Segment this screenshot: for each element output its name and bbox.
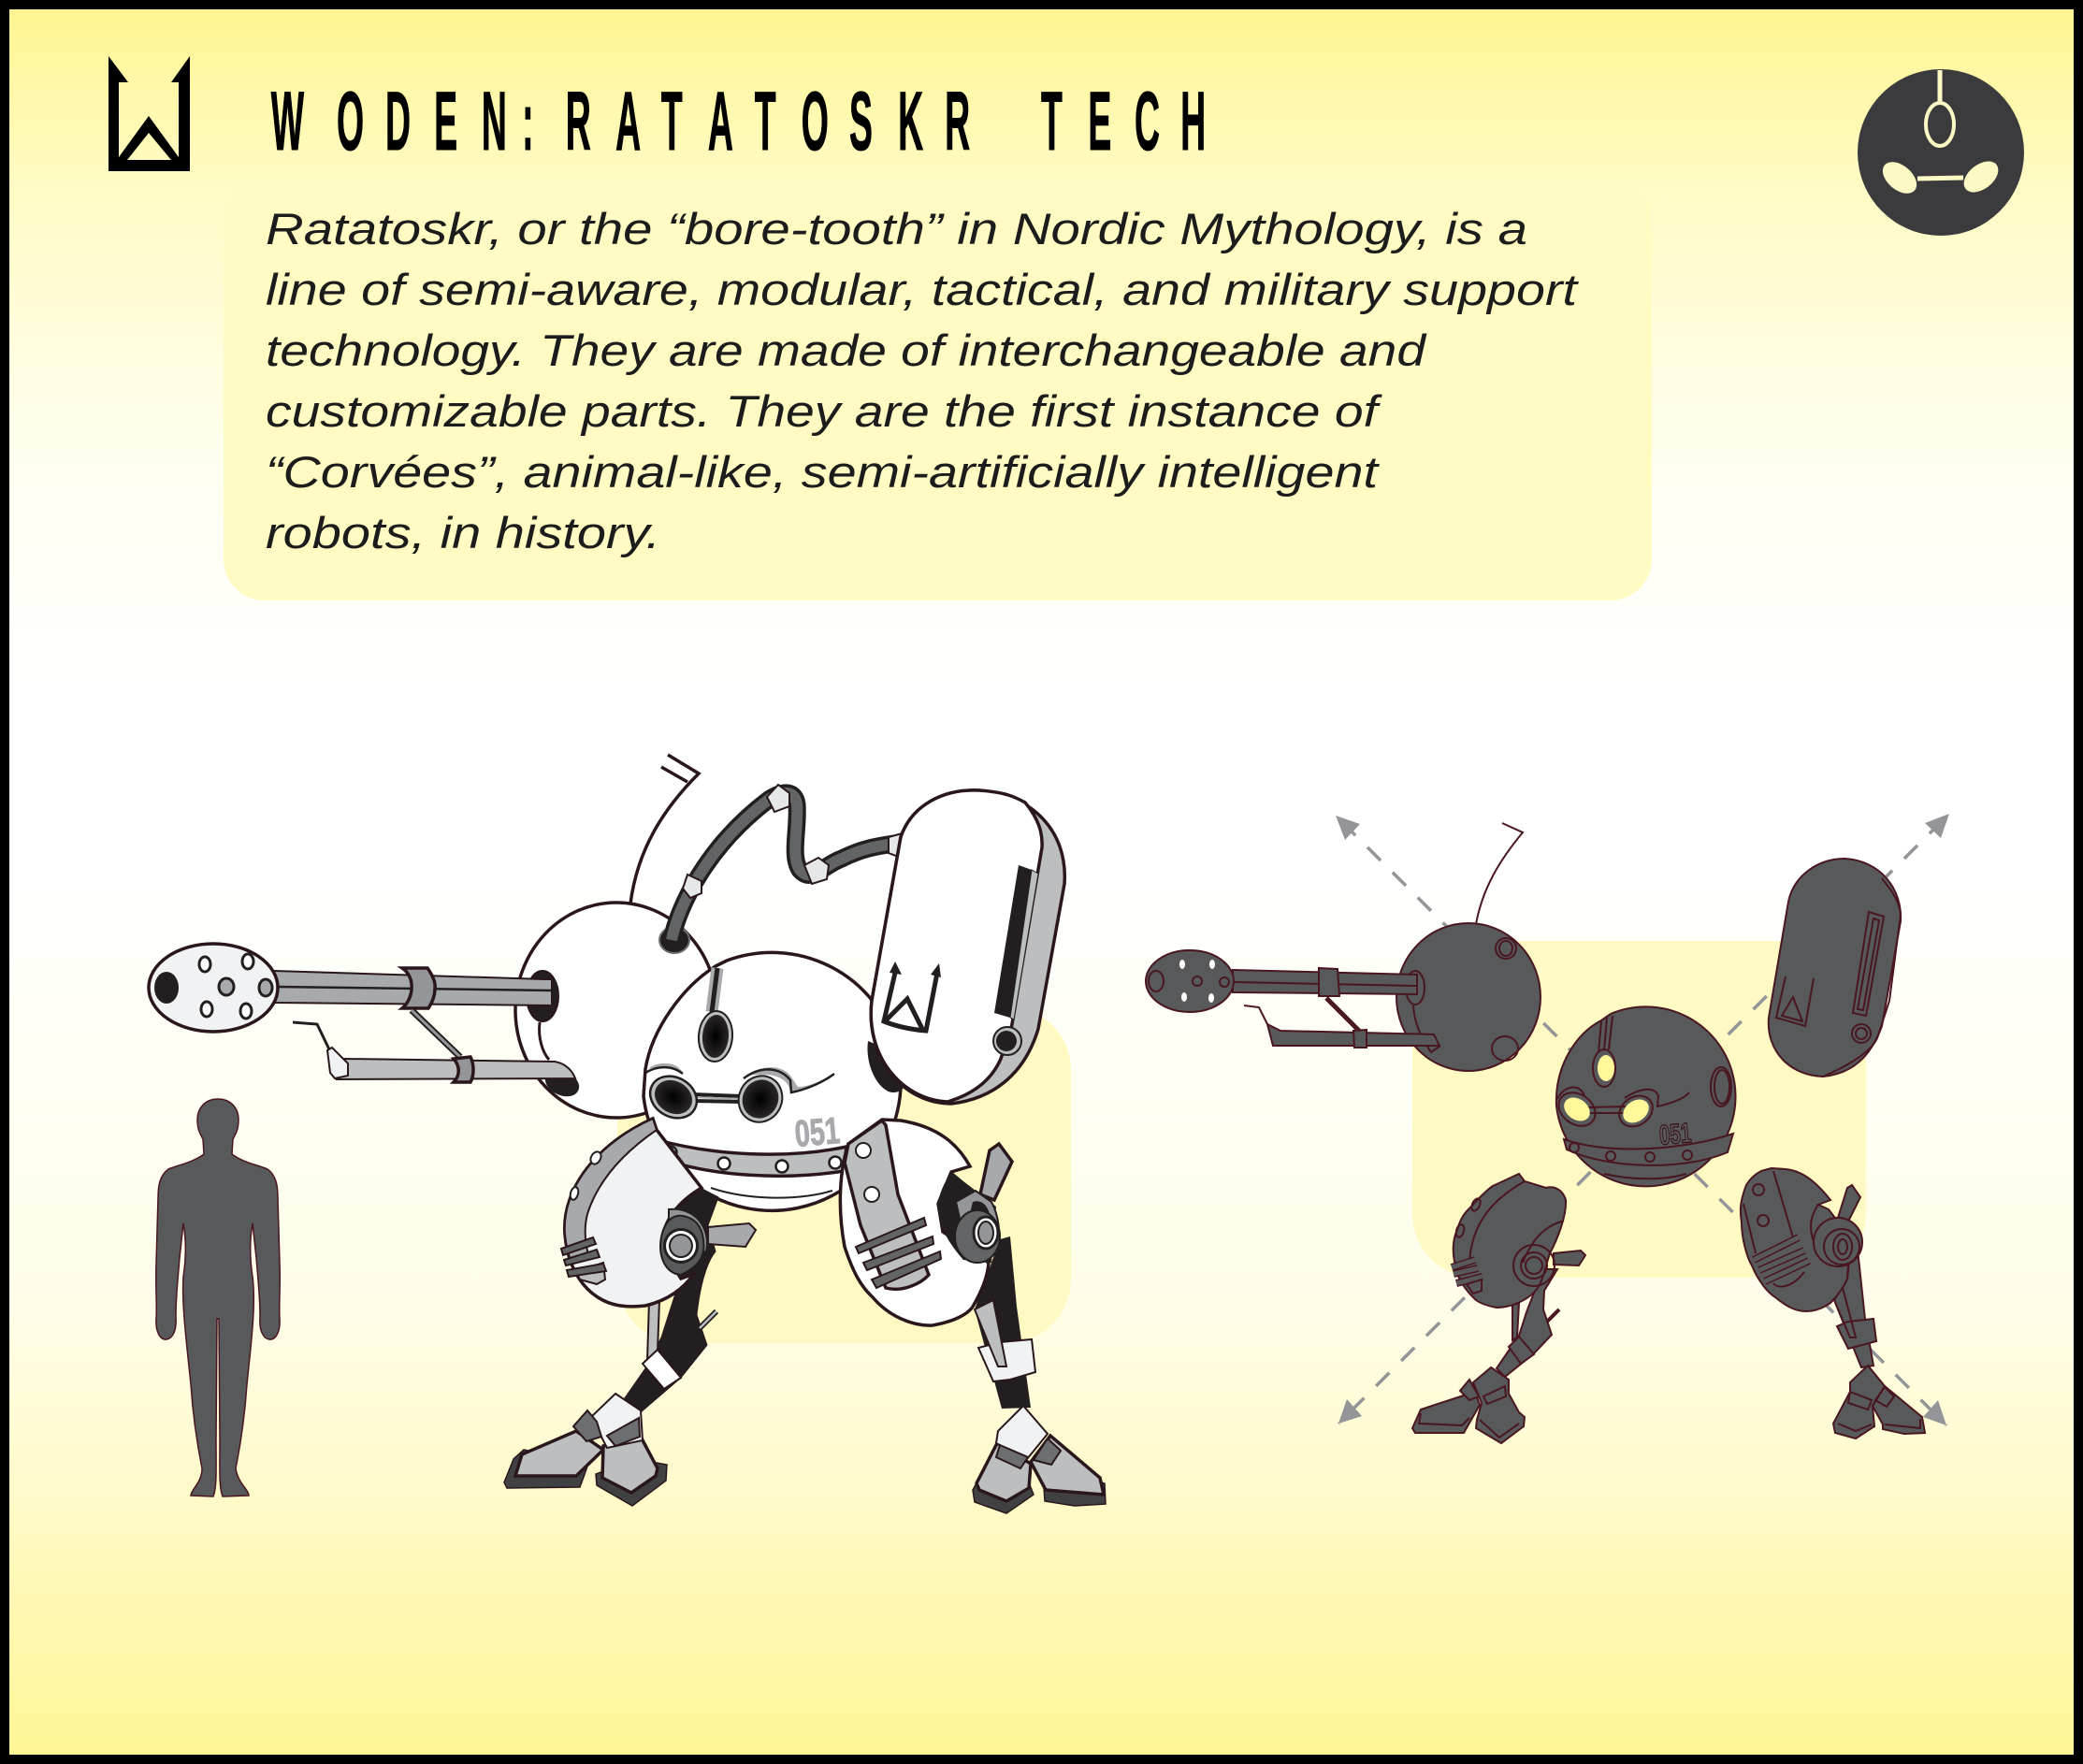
intro paragraph: customizable parts. They are the first instance of: [266, 386, 1383, 436]
brows: [645, 1063, 834, 1093]
dark collar belt: [1564, 1134, 1733, 1165]
intro text panel: [224, 178, 1652, 600]
logo: Woden crown W: [108, 56, 190, 171]
dark gun: [1146, 950, 1439, 1048]
shield slot: [994, 865, 1032, 1018]
shield capsule: [871, 790, 1064, 1104]
shield W logo: [884, 962, 941, 1031]
right shoulder strap: [845, 1121, 941, 1289]
collar belt: [655, 1139, 846, 1176]
left hip blade: [708, 1223, 756, 1247]
backdrop square: exploded robot: [1412, 941, 1866, 1278]
dark head: [1553, 1006, 1736, 1186]
right shoulder inner cavity: [938, 1172, 996, 1263]
left thigh and leg: [624, 1186, 756, 1412]
icon: robot face badge: [1858, 69, 2024, 236]
head: [643, 952, 901, 1210]
ear behind shield: [867, 1041, 907, 1092]
dark left shoulder: [1452, 1174, 1566, 1308]
dark shield: [1769, 859, 1901, 1077]
right hip blade: [980, 1144, 1012, 1200]
right hip gear: [955, 1191, 1000, 1263]
right foot: [973, 1406, 1106, 1513]
gun pod sphere: [515, 903, 717, 1118]
goggle eyes: [643, 1068, 789, 1129]
cable tube: [659, 785, 905, 953]
left hip gear: [660, 1209, 707, 1275]
left foot: [504, 1394, 667, 1506]
shield socket: [993, 1027, 1021, 1055]
serial number 051: 051: [793, 1109, 842, 1155]
right shoulder pad: [840, 1120, 1000, 1325]
dark left foot: [1412, 1367, 1525, 1443]
dark right shoulder: [1741, 1168, 1862, 1311]
intro paragraph: Ratatoskr, or the “bore-tooth” in Nordic Mythology, is a: [266, 204, 1527, 253]
intro paragraph: line of semi-aware, modular, tactical, and military support: [266, 265, 1579, 314]
title: WODEN:RATATOSKR TECH: [271, 75, 1206, 168]
intro paragraph: [266, 204, 1579, 557]
gun: upper barrel: [274, 968, 558, 1021]
left shoulder straps: [561, 1237, 606, 1284]
right leg: [975, 1236, 1035, 1409]
main robot: [149, 755, 1106, 1513]
exploded robot: [1146, 823, 1925, 1443]
intro paragraph: “Corvées”, animal-like, semi-artificially intelligent: [266, 447, 1380, 497]
dark head goggles: [1553, 1086, 1658, 1133]
top eye: [697, 1010, 734, 1063]
dark right leg: [1834, 1185, 1876, 1367]
antenna: [630, 755, 699, 904]
human scale silhouette: [156, 1099, 280, 1497]
backdrop square: main robot: [617, 1006, 1071, 1343]
intro paragraph: robots, in history.: [266, 508, 660, 557]
gun: muzzle head: [149, 944, 278, 1032]
dark right foot: [1833, 1366, 1925, 1439]
exploded diagram arrows: [1336, 814, 1949, 1425]
dark serial number 051: 051: [1658, 1118, 1693, 1151]
gun: lower barrel and strut: [293, 1010, 582, 1100]
intro paragraph: technology. They are made of interchangeable and: [266, 325, 1427, 375]
left shoulder pad: [561, 1119, 707, 1307]
dark left leg: [1497, 1251, 1585, 1377]
dark gun pod: [1396, 923, 1541, 1071]
left shin cuff: [643, 1350, 681, 1389]
head stripe: [712, 968, 717, 1012]
right shin cuff: [978, 1339, 1035, 1381]
dark antenna: [1476, 823, 1523, 924]
